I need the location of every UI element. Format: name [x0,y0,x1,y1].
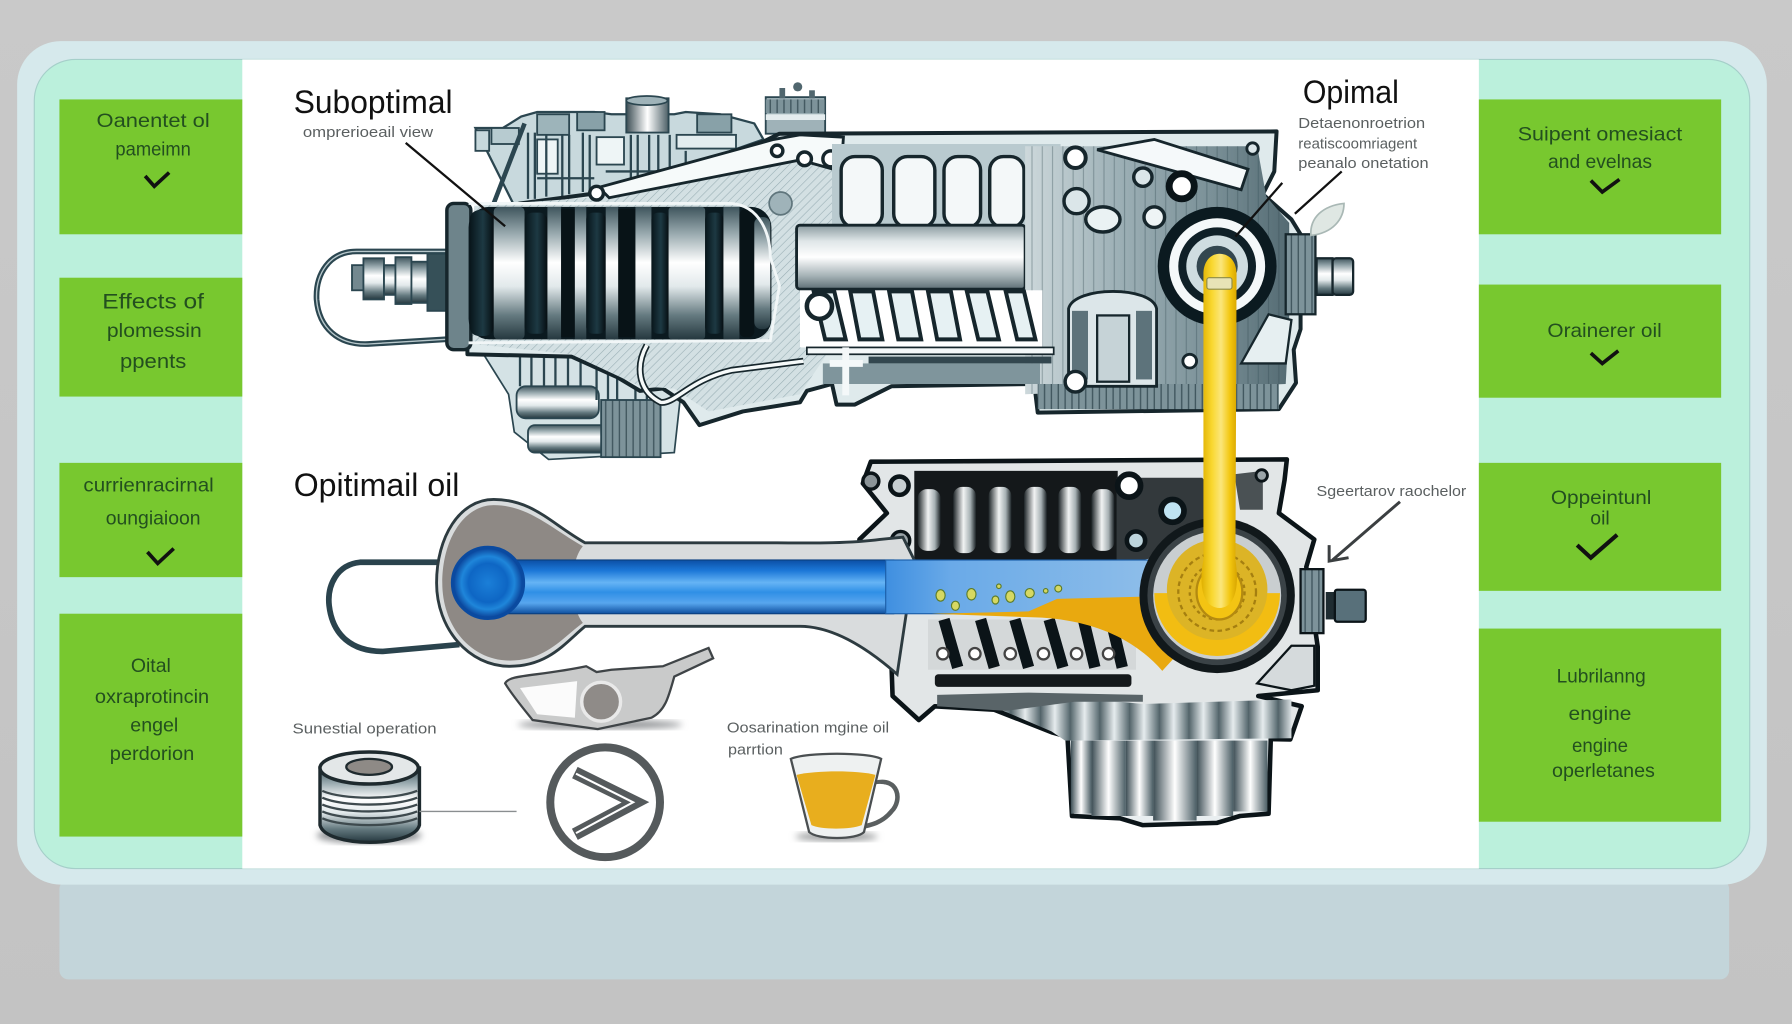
right box 4: operletanes [1552,760,1655,782]
hatched casing [463,149,834,411]
wrench grey disc [442,505,583,661]
heading: Suboptimal: Suboptimal [294,84,453,120]
right box 1: and evelnas [1548,151,1652,173]
panel: right green column [1479,99,1721,822]
bellows housing contour [469,203,779,343]
sump pan [1067,736,1271,825]
icon: cup of oil [791,754,897,841]
oil stream [1201,254,1237,608]
flange [447,203,471,350]
right box 2: Orainerer oil [1547,320,1662,342]
label: bottom left: Sunestial operation [293,722,437,738]
right box 3: oil [1590,508,1610,530]
wrench head and neck [437,499,914,674]
dark casing top right [1234,471,1263,510]
finned band above sump [1003,697,1291,741]
left box 2: plomessin [107,320,202,342]
belt loop [317,251,463,344]
text: optimal description: peanalo onetation [1298,156,1429,172]
lower engine upper ribs [914,471,1118,560]
right box 1 [1479,99,1721,234]
lower rail [807,347,1054,395]
blue pipe [488,560,894,614]
heading: Optimal oil: Opitimail oil [294,467,459,503]
housing body [466,131,1301,425]
chart: upper engine cutaway (suboptimal) [317,82,1353,459]
oil pool [931,597,1175,671]
text: suboptimal sublabel: omprerioeail view [303,125,433,141]
left box 4: Oital [131,655,171,677]
upper ribs area [832,144,1061,227]
right gear and nub [1286,234,1353,314]
bearing rings [1158,207,1277,326]
arrow: callout arrow [1329,502,1400,561]
left box 3: currienracirnal [83,474,214,496]
label: bottom centre: parrtion [728,742,783,758]
heading: Opimal: Opimal [1303,74,1399,110]
main shaft [797,225,1025,289]
white casing rib below bellows [640,345,803,402]
right box 4: Lubrilanng [1557,665,1646,687]
dark casing near wheel [1117,478,1248,560]
shaded right casing [1025,146,1289,394]
label: lower engine callout: Sgeertarov raochelor [1317,484,1466,500]
arrow: optimal leader [1235,171,1342,237]
right gear lower [1301,569,1366,633]
left box 4 [59,614,242,837]
dome and bolts [1064,139,1291,392]
left box 2: Effects of [102,289,205,314]
white casing rib inner [640,345,803,402]
left box 3 [59,463,242,577]
blue knob [453,547,523,618]
icon: leaf [1311,203,1344,235]
right box 4: engine [1572,735,1628,757]
housing lower [859,459,1318,739]
arrow: suboptimal leader [406,143,505,226]
icon: oil pan part [505,648,713,729]
bottom machinery [480,349,686,459]
bolts on arm [590,145,839,200]
panel: left green column [59,99,242,837]
dark band left [937,693,1143,711]
lower hatched band [1038,384,1279,409]
dark rail [935,674,1131,687]
oil cap top [766,82,825,134]
right box 2 [1479,285,1721,398]
text: optimal description [1298,116,1429,172]
panel: central white diagram area [242,59,1479,869]
arm bracket [599,135,843,198]
wheel [1139,518,1295,673]
left box 3: oungiaioon [106,508,201,530]
bellows [469,207,771,339]
shaft nub left [352,254,450,311]
right box 1: Suipent omesiact [1518,124,1683,146]
right box 3 [1479,463,1721,591]
lower ribs [928,619,1136,670]
hatched plate beside wheel [1257,646,1314,690]
icon: oil filter cylinder [317,752,422,843]
oil particles [936,584,1062,610]
label: bottom centre: Oosarination mgine oil [727,721,889,737]
casing circle [769,192,792,215]
left box 4: engel [130,714,178,736]
connector line [419,810,517,812]
left box 1: Oanentet ol [97,110,210,132]
right box 4 [1479,629,1721,822]
left box 1: pameimn [115,138,191,160]
top machinery [475,96,763,206]
belt loop lower [329,562,459,651]
shadow plate below the frame [59,880,1729,979]
chart: lower engine cutaway (optimal) [329,459,1366,825]
left box 4: oxraprotincin [95,686,209,708]
left box 1 [59,99,242,234]
icon: circled chevron [550,747,660,857]
left box 4: perdorion [110,743,194,765]
translucent pipe in engine [886,560,1149,614]
right box 3: Oppeintunl [1551,487,1651,509]
lower ribs [800,290,1042,347]
text: optimal description: reatiscoomriagent [1298,137,1418,153]
lower engine bolts [863,470,1267,550]
left box 2: ppents [120,350,186,373]
label: bottom centre [727,721,889,758]
left box 2 [59,278,242,397]
right box 4: engine [1569,703,1631,725]
text: optimal description: Detaenonroetrion [1298,116,1425,132]
